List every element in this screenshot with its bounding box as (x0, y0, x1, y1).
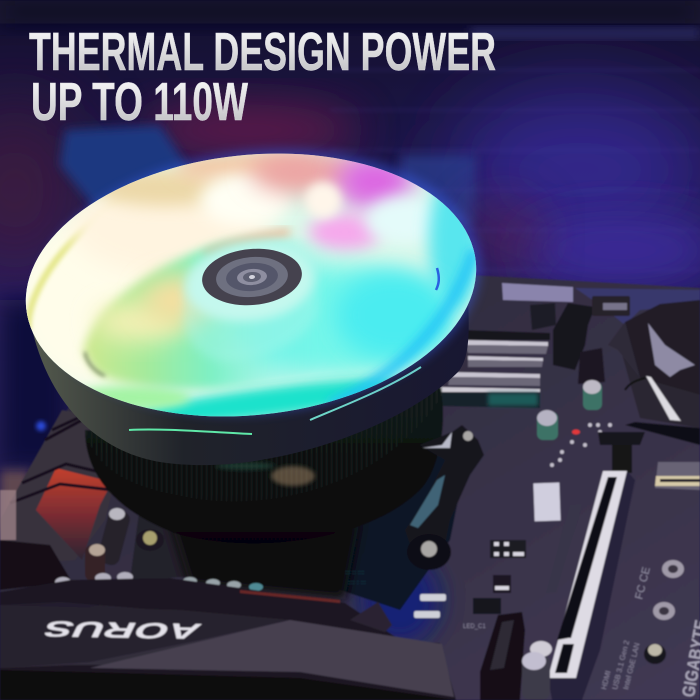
capacitors near x1 slot (522, 641, 552, 700)
row of capacitor tops under card (55, 572, 263, 591)
board silkscreen text: USB 3.1 Gen 2 (610, 639, 631, 690)
green PCB traces (345, 570, 366, 586)
housing light streak left (129, 429, 252, 434)
VRM capacitors and mounting screw (85, 505, 220, 581)
outer glow (21, 127, 495, 437)
board silkscreen text: HDMI (599, 670, 613, 690)
M.2 connector (655, 462, 700, 490)
RGB rim (13, 132, 489, 438)
standoff holes (644, 560, 684, 664)
memory slots (436, 283, 573, 408)
CPU cooler (10, 127, 495, 465)
board silkscreen text: LED_C1 (463, 624, 486, 630)
board silkscreen text: FC CE (633, 566, 653, 601)
heatsink fins (85, 385, 445, 600)
AORUS graphics card shroud (0, 578, 456, 700)
small board chips (473, 540, 526, 614)
label sticker (533, 483, 561, 521)
hub sticker (200, 245, 304, 309)
AORUS logo text: AORUS (38, 617, 205, 644)
chipset heatsink with AORUS eagle logo (608, 300, 700, 445)
fan housing (30, 300, 469, 465)
green PCB traces: ::::: :: :::: (348, 580, 366, 586)
title: UP TO 110W (31, 72, 248, 132)
rainbow light (26, 154, 476, 416)
retention bracket right (405, 425, 484, 618)
green PCB traces: :::: ::: ::::: (345, 570, 364, 576)
title (29, 22, 496, 132)
housing light streak right (310, 367, 421, 420)
VRM components (530, 296, 645, 473)
secondary PCIe x1 slot (480, 612, 525, 700)
PCIe x16 slot (546, 471, 635, 700)
board silkscreen text: Intel GbE LAN (621, 642, 642, 690)
hub collar (182, 238, 318, 362)
inner opening with fan blades (83, 232, 439, 389)
left VRM heatsink (0, 410, 115, 590)
motherboard (0, 275, 700, 700)
board silkscreen text (463, 566, 700, 699)
